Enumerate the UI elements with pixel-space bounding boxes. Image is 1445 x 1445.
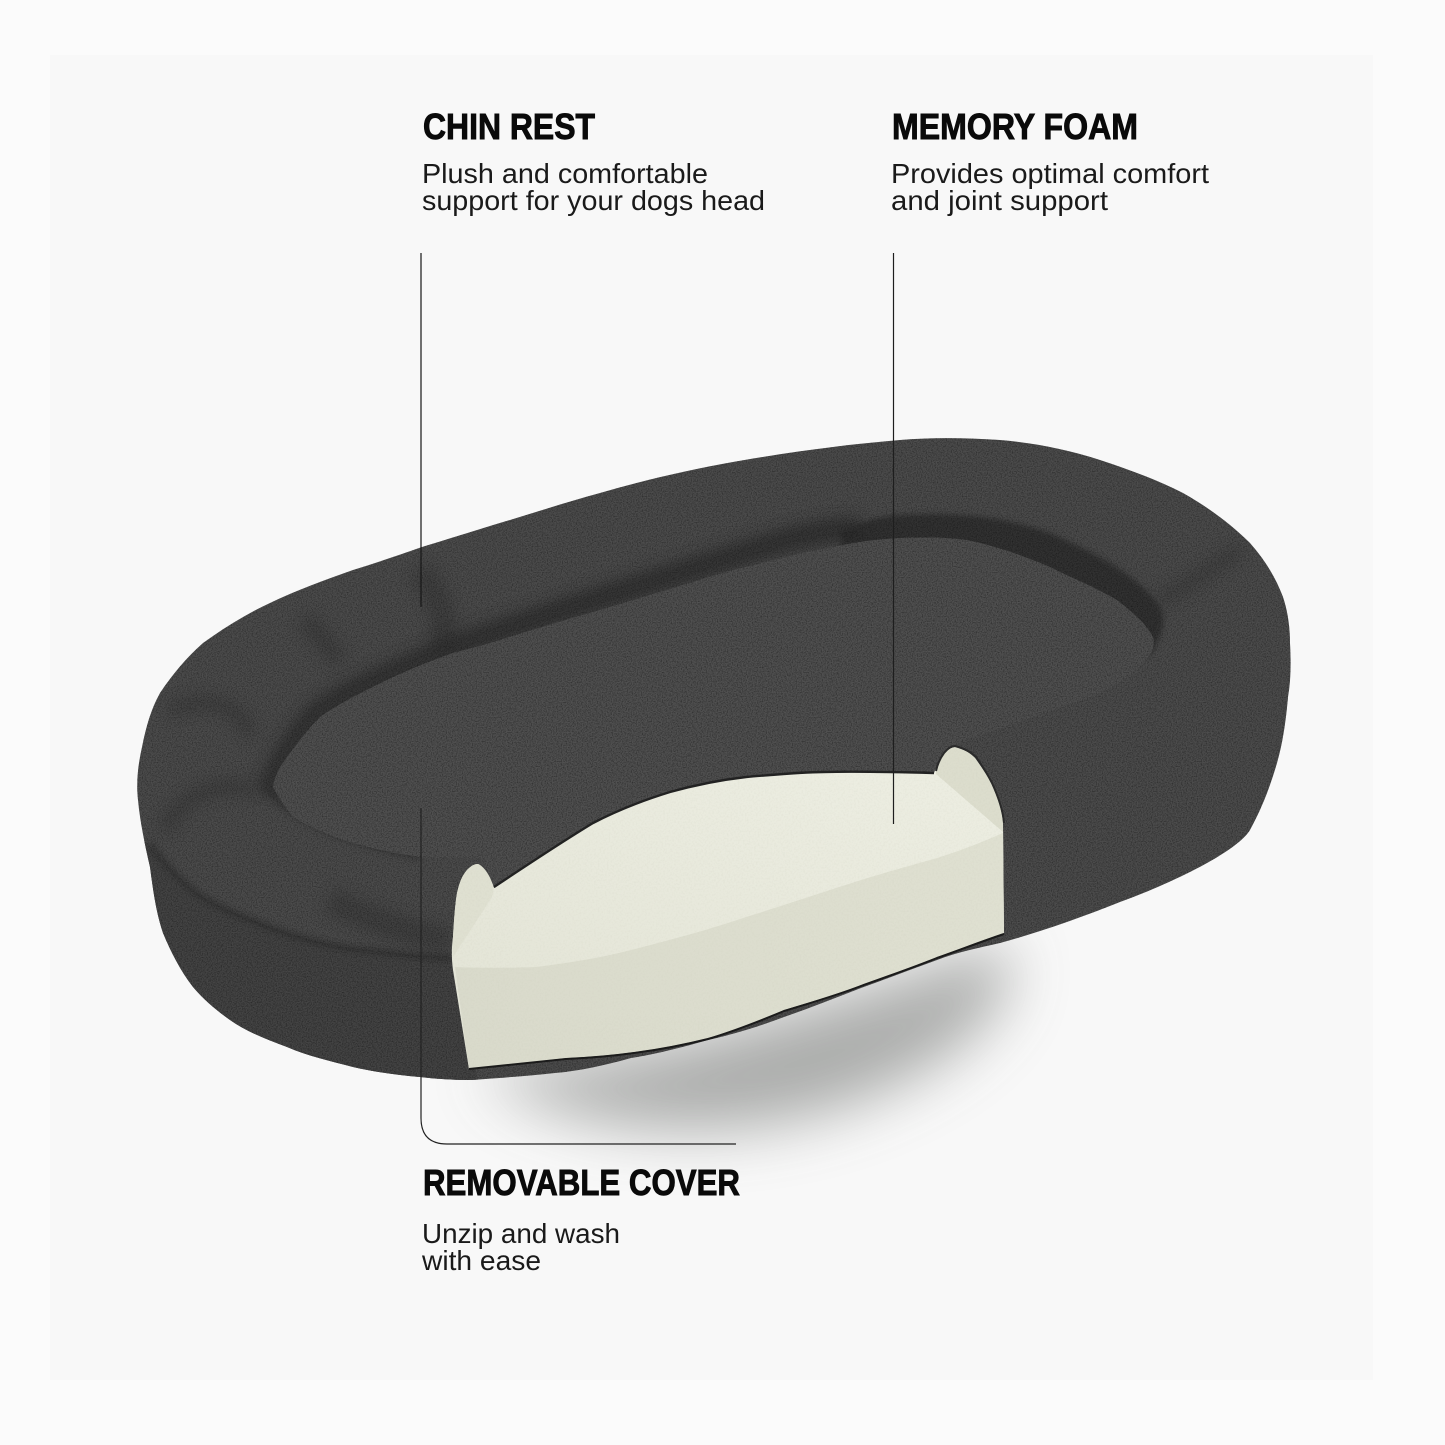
- text: chin rest: support for your dogs head: [422, 185, 765, 216]
- foam wall right: [936, 747, 1003, 832]
- foam block: [450, 740, 1010, 1080]
- foam side face: [455, 833, 1004, 1069]
- foam top surface: [452, 747, 1004, 1069]
- seat cushion: [273, 537, 1154, 887]
- text: memory foam: and joint support: [891, 185, 1108, 216]
- zip edge: [494, 772, 934, 887]
- foam speckle: [450, 740, 1010, 1080]
- text: chin rest: [422, 106, 765, 216]
- text: removable cover: [421, 1162, 740, 1276]
- text: memory foam: Provides optimal comfort: [891, 158, 1209, 189]
- text: removable cover: Unzip and wash: [422, 1218, 620, 1249]
- bed outer shell: [137, 438, 1291, 1080]
- dog bed illustration: [125, 425, 1300, 1090]
- callout line: memory foam: [892, 253, 894, 824]
- fabric grain: [125, 425, 1300, 1085]
- lower side panel: [144, 840, 478, 1080]
- cover edge right: [936, 746, 1004, 823]
- callout line: removable cover: [421, 808, 736, 1144]
- text: memory foam: MEMORY FOAM: [892, 106, 1138, 147]
- callout line: chin rest: [420, 253, 422, 607]
- foam bottom edge: [469, 934, 1004, 1069]
- text: removable cover: with ease: [421, 1245, 541, 1276]
- text: memory foam: [891, 106, 1209, 216]
- text: chin rest: Plush and comfortable: [422, 158, 708, 189]
- rim soft shading: [165, 550, 1240, 940]
- text: removable cover: REMOVABLE COVER: [423, 1162, 740, 1203]
- rear inner band shadow: [840, 514, 1163, 660]
- seam shadow: [150, 843, 452, 957]
- text: chin rest: CHIN REST: [423, 106, 595, 147]
- foam wall left: [453, 864, 494, 957]
- left inner crease shadow: [268, 528, 860, 795]
- floor shadow: [480, 945, 1009, 1130]
